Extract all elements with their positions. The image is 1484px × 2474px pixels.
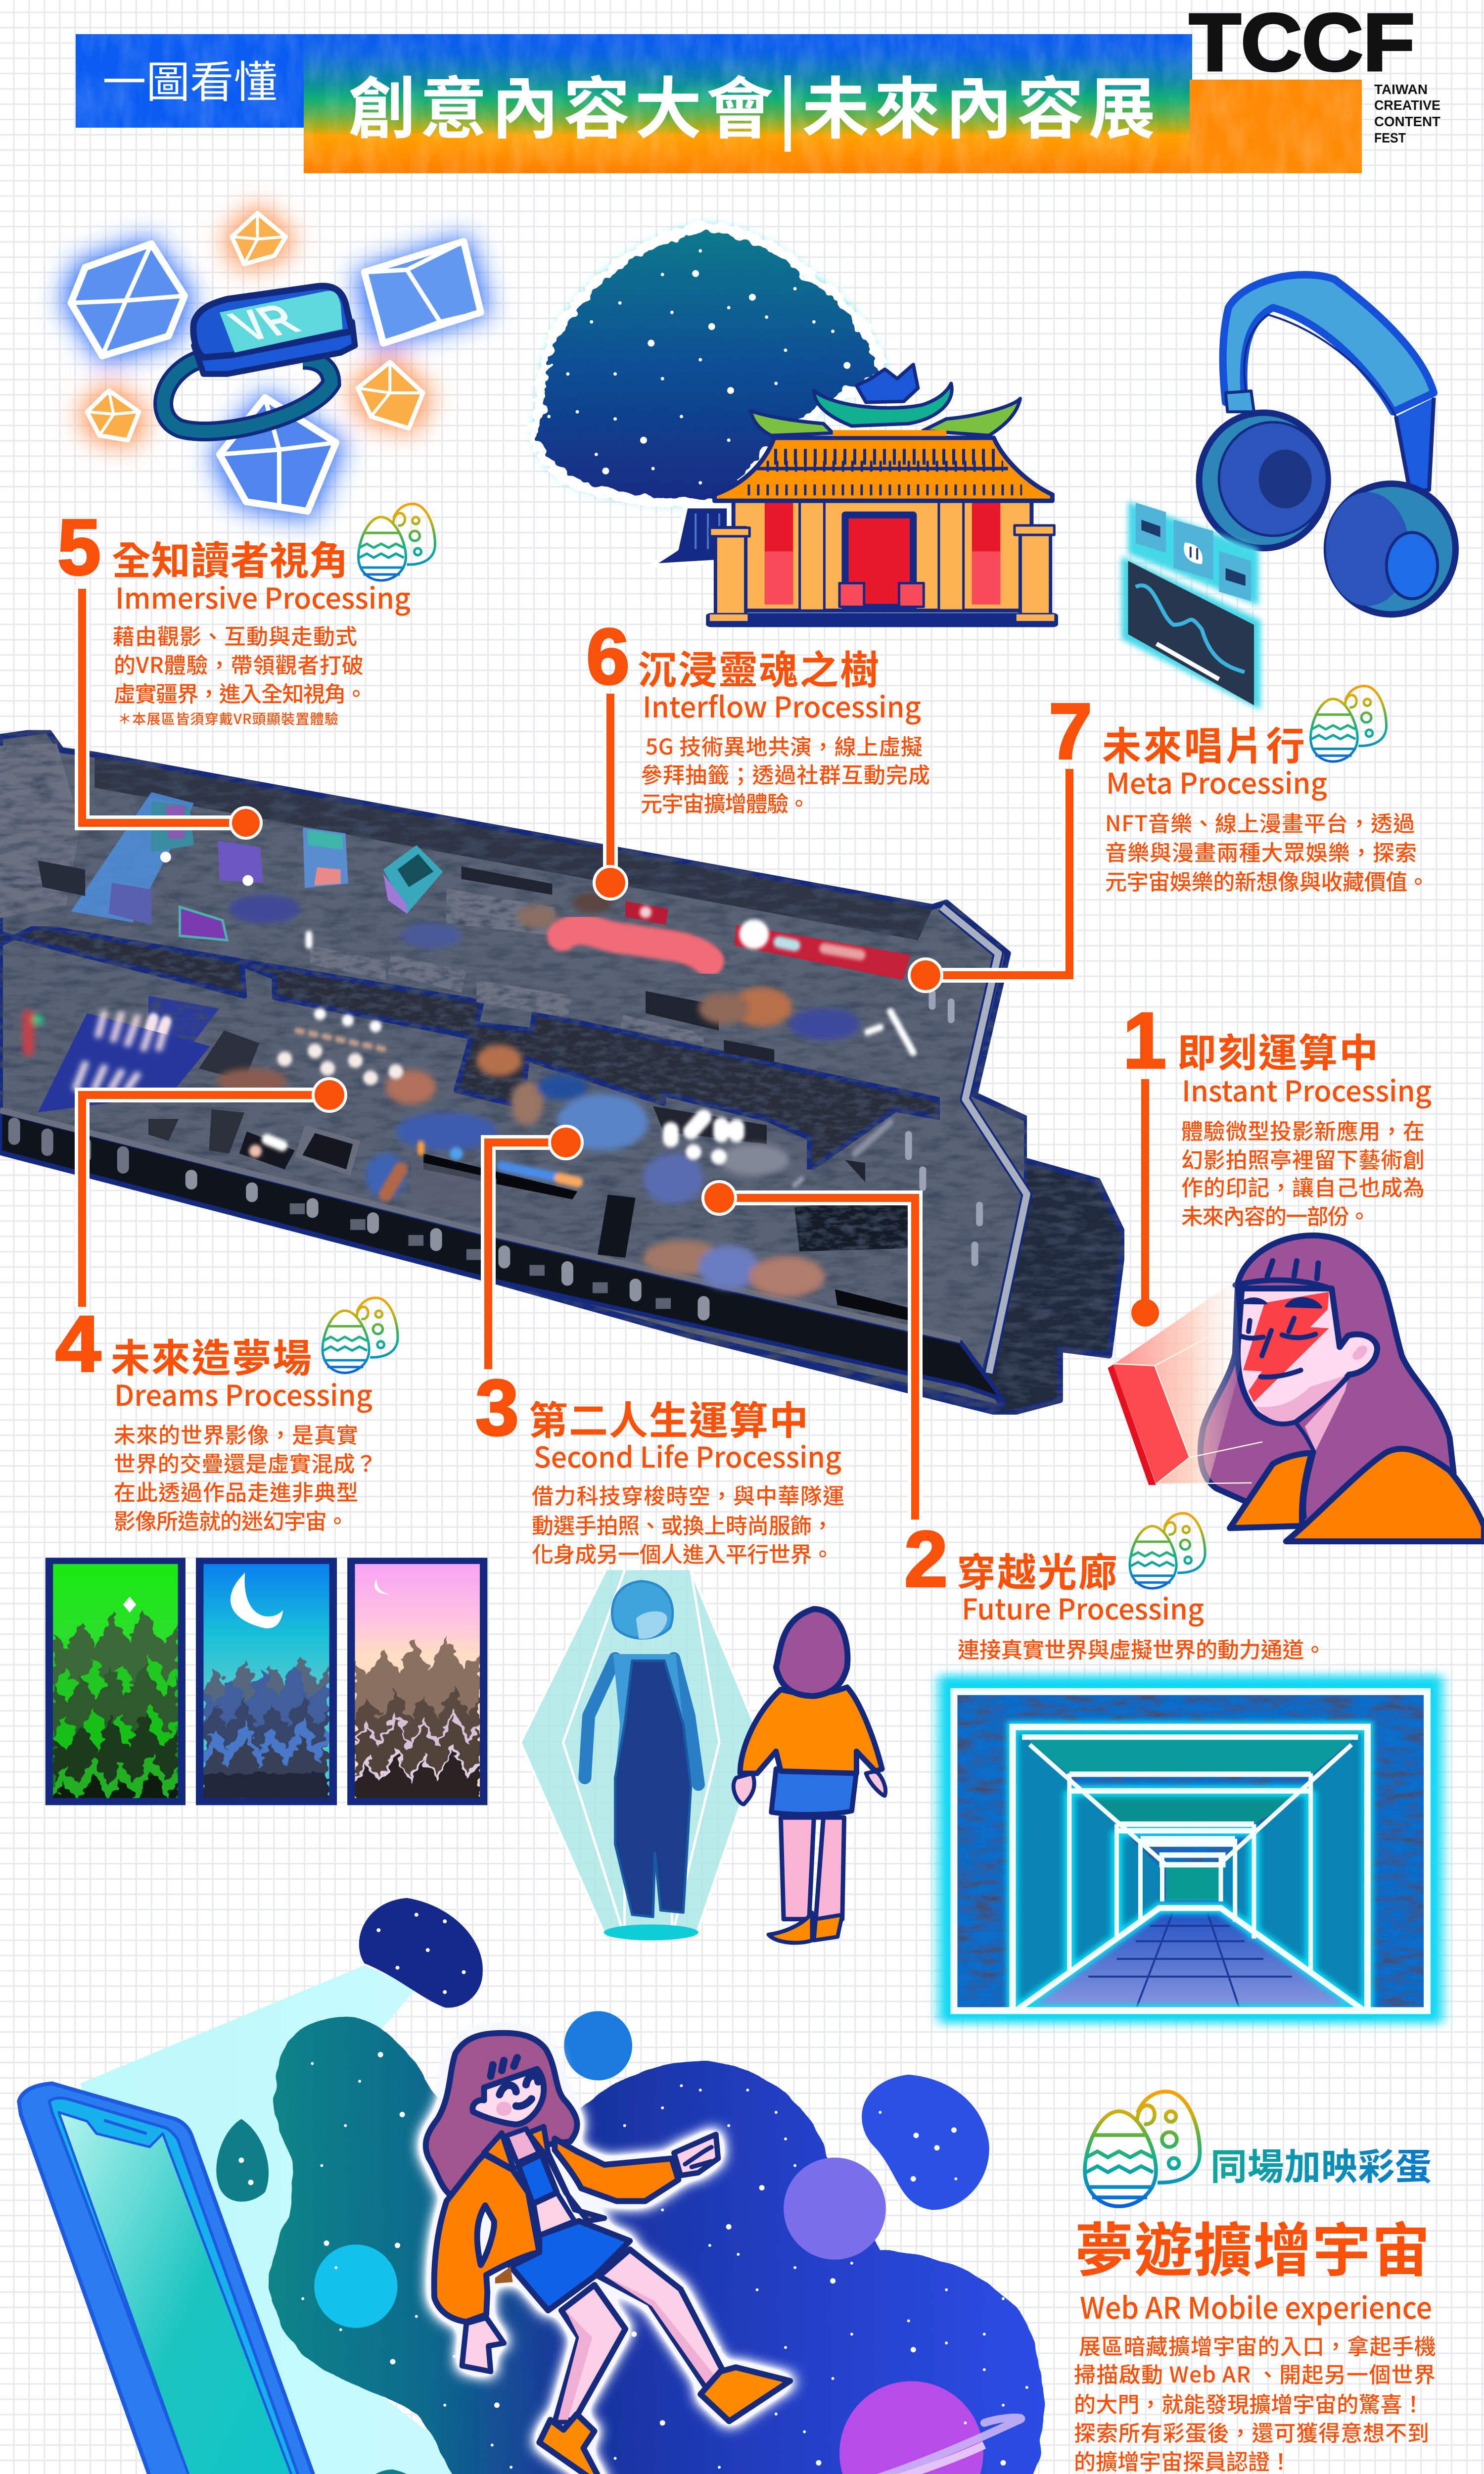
floating girl (426, 2033, 790, 2474)
number 2: 2 (904, 1515, 948, 1603)
panel: pink mountains (347, 1558, 488, 1805)
title 1: 即刻運算中 (1177, 1021, 1378, 1078)
body 5 (113, 619, 367, 728)
cosmos shapes (216, 2011, 1044, 2474)
connector 6 (603, 694, 618, 876)
bonus body: 的大門，就能發現擴增宇宙的驚喜！ (1074, 2387, 1424, 2419)
large egg icon (1085, 2092, 1200, 2206)
section: web AR bonus (566, 2092, 1436, 2474)
illustration: temple (706, 365, 1058, 627)
section 2: future processing (703, 1182, 1326, 1664)
number 5: 5 (57, 503, 101, 591)
subtitle 7: Meta Processing (1106, 761, 1327, 802)
connector 2 (727, 1198, 915, 1520)
section 1: instant processing (1123, 996, 1432, 1327)
small dark blob (359, 1898, 483, 2008)
title 4: 未來造夢場 (111, 1327, 312, 1383)
hologram prism (520, 1570, 762, 1940)
connector 7 (935, 769, 1069, 975)
body 6: 5G 技術異地共演，線上虛擬 (646, 729, 923, 761)
body 7 (1105, 806, 1429, 896)
title 6: 沉浸靈魂之樹 (638, 638, 879, 695)
title 5: 全知讀者視角 (112, 529, 348, 586)
body 3: 借力科技穿梭時空，與中華隊運 (532, 1478, 844, 1510)
illustration: hologram figure and girl (520, 1570, 885, 1943)
banner: orange extension (1190, 80, 1362, 173)
connector 3 (488, 1142, 556, 1369)
section 6: interflow processing (586, 612, 930, 899)
subtitle 2: Future Processing (962, 1586, 1204, 1628)
egg icon 4 (323, 1298, 398, 1373)
dot 6 (594, 866, 627, 899)
main title: 創意內容大會|未來內容展 (348, 55, 1156, 152)
bonus body: 探索所有彩蛋後，還可獲得意想不到 (1074, 2416, 1429, 2447)
logo: TCCF: CONTENT (1374, 114, 1440, 129)
body 1: 未來內容的一部份。 (1181, 1199, 1370, 1231)
connector 1 (1141, 1079, 1149, 1306)
subtitle 6: Interflow Processing (643, 684, 921, 726)
body 4: 未來的世界影像，是真實 (114, 1418, 358, 1449)
bonus label: 同場加映彩蛋 (1210, 2138, 1432, 2190)
body 4: 影像所造就的迷幻宇宙。 (114, 1504, 348, 1535)
body 4 (114, 1418, 377, 1535)
bonus title: 夢遊擴增宇宙 (1075, 2203, 1430, 2288)
bonus body: 掃描啟動 Web AR 、開起另一個世界 (1074, 2357, 1436, 2389)
number 7: 7 (1049, 687, 1092, 775)
logo: TCCF: CREATIVE (1374, 97, 1440, 113)
bonus body (1074, 2329, 1436, 2474)
logo: TCCF: FEST (1374, 130, 1406, 145)
section 5: immersive processing (57, 503, 435, 838)
dark dividing walls (0, 866, 940, 1321)
exhibit details and lights (146, 893, 913, 1315)
logo: TCCF: TAIWAN (1374, 82, 1428, 97)
illustration: starry tree (535, 226, 885, 566)
dot 2 (703, 1182, 736, 1214)
dot 4 (313, 1079, 346, 1111)
building shell (0, 730, 1124, 1415)
phone (19, 2084, 332, 2474)
illustration: headphones (1199, 275, 1456, 615)
number 3: 3 (475, 1363, 519, 1452)
body 3 (532, 1478, 844, 1569)
banner: label block (76, 34, 308, 128)
egg icon 5 (358, 504, 435, 580)
subtitle 1: Instant Processing (1182, 1068, 1432, 1110)
body 4: 世界的交疊還是虛實混成？ (114, 1446, 377, 1478)
body 6: 元宇宙擴增體驗。 (641, 786, 810, 818)
illustration: neon tunnel (949, 1686, 1432, 2012)
egg icon 7 (1310, 686, 1387, 761)
illustration: VR headset with cubes: VR (219, 295, 310, 350)
body 3: 動選手拍照、或換上時尚服飾， (532, 1508, 834, 1540)
body 5: 的VR體驗，帶領觀者打破 (114, 648, 364, 679)
body 1 (1181, 1114, 1425, 1231)
number 4: 4 (55, 1299, 101, 1388)
connector 4 (82, 1095, 322, 1307)
dot 7 (909, 959, 942, 992)
body 3: 化身成另一個人進入平行世界。 (532, 1537, 834, 1569)
dot 3 (550, 1126, 582, 1159)
title 3: 第二人生運算中 (529, 1389, 808, 1446)
panel set: three mountain landscapes (46, 1558, 488, 1805)
label text: 一圖看懂 (102, 48, 278, 110)
illustration: woman with projected face (1108, 1236, 1484, 1541)
illustration: VR headset with cubes (61, 203, 490, 521)
body 5: 藉由觀影、互動與走動式 (113, 619, 357, 651)
subtitle 4: Dreams Processing (114, 1373, 372, 1414)
dot 1 (1131, 1299, 1159, 1327)
logo: TCCF (1189, 0, 1440, 145)
body 1: 幻影拍照亭裡留下藝術創 (1181, 1142, 1425, 1174)
body 7: 音樂與漫畫兩種大眾娛樂，探索 (1105, 835, 1417, 867)
light beam (81, 1965, 644, 2474)
body 2: 連接真實世界與虛擬世界的動力通道。 (958, 1632, 1326, 1664)
panel: green mountains (46, 1558, 186, 1805)
exhibit details left wing (14, 792, 979, 1263)
header banner (76, 34, 1362, 173)
number 1: 1 (1123, 996, 1166, 1085)
body 5: ＊本展區皆須穿戴VR頭顯裝置體驗 (118, 709, 338, 728)
body 1: 作的印記，讓自己也成為 (1181, 1170, 1425, 1202)
egg icon 2 (1130, 1513, 1205, 1588)
body 5: 虛實疆界，進入全知視角。 (114, 676, 367, 708)
building floor plan (0, 730, 1124, 1415)
subtitle 3: Second Life Processing (534, 1434, 841, 1476)
bonus subtitle: Web AR Mobile experience (1080, 2284, 1432, 2328)
panel: blue mountains with moon (196, 1558, 337, 1805)
body 4: 在此透過作品走進非典型 (114, 1475, 358, 1507)
subtitle 5: Immersive Processing (115, 575, 411, 617)
number 6: 6 (586, 612, 630, 701)
section 3: second life processing (475, 1126, 844, 1569)
connector 5 (82, 585, 246, 823)
illustration: AR phone, cosmos and floating girl (19, 1898, 1044, 2474)
hologram person (585, 1581, 698, 1917)
section 7: meta processing (909, 686, 1429, 992)
body 7: NFT音樂、線上漫畫平台，透過 (1105, 806, 1415, 838)
dot 5 (231, 808, 261, 838)
section 4: dreams processing (55, 1079, 398, 1535)
bonus body: 展區暗藏擴增宇宙的入口，拿起手機 (1079, 2329, 1436, 2361)
title 7: 未來唱片行 (1102, 714, 1305, 771)
body 7: 元宇宙娛樂的新想像與收藏價值。 (1105, 864, 1429, 896)
body 6 (641, 729, 930, 818)
title 2: 穿越光廊 (957, 1541, 1117, 1598)
girl seen from behind (734, 1609, 885, 1943)
banner: gradient title bar (304, 34, 1192, 173)
body 1: 體驗微型投影新應用，在 (1181, 1114, 1425, 1145)
body 6: 參拜抽籤；透過社群互動完成 (641, 758, 930, 789)
illustration: music player UI (1121, 502, 1260, 710)
